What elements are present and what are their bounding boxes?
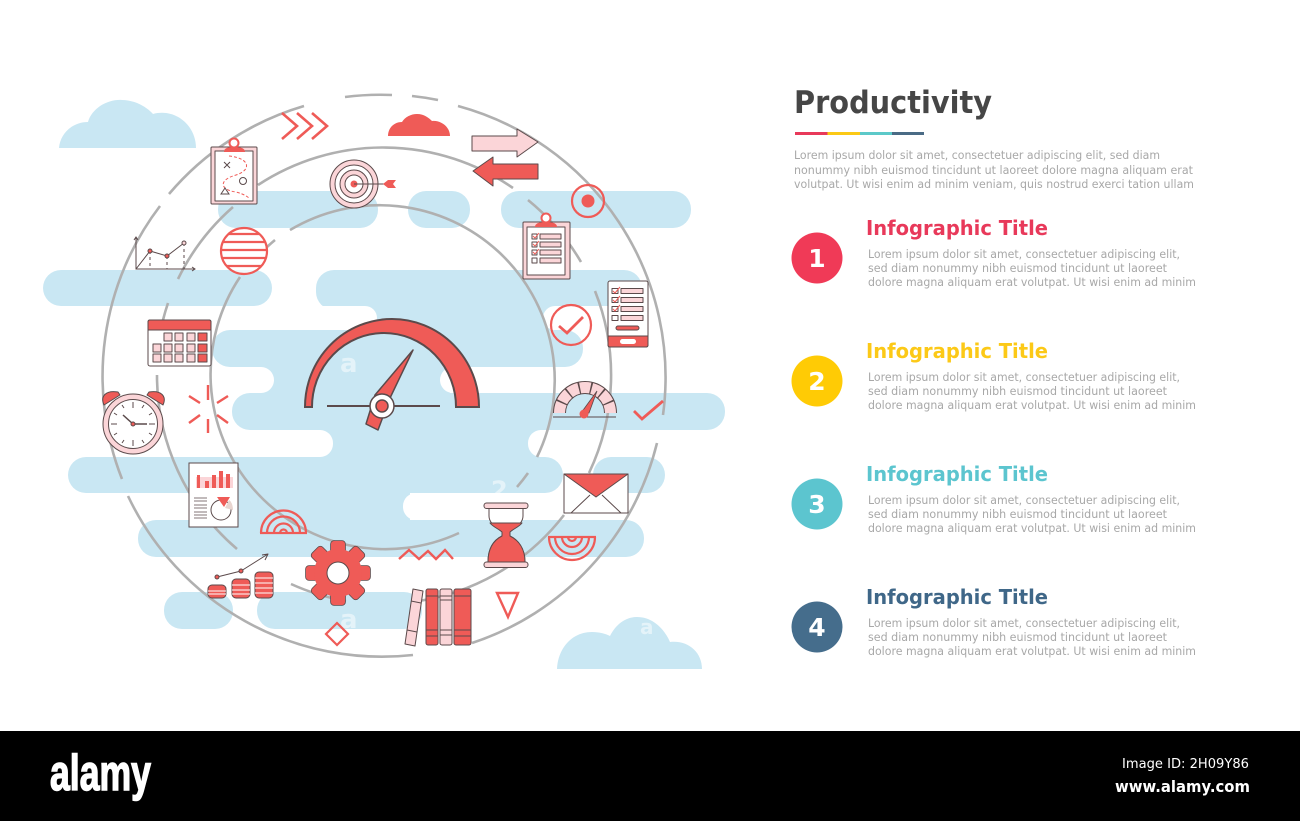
- badge 4: 4: [808, 613, 826, 642]
- watermark glyphs: a: [640, 615, 654, 639]
- watermark glyphs: [340, 349, 654, 639]
- item 2 text: [868, 370, 1196, 412]
- intro text: [794, 148, 1194, 191]
- item 3 text: dolore magna aliquam erat volutpat. Ut wisi enim ad minim: [868, 521, 1196, 535]
- icon: inverted rainbow: [548, 537, 596, 560]
- intro text: volutpat. Ut wisi enim ad minim veniam, quis nostrud exerci tation ullam: [794, 177, 1194, 191]
- icon: checklist clipboard: [523, 214, 570, 279]
- item 3 text: Lorem ipsum dolor sit amet, consectetuer adipiscing elit,: [868, 493, 1180, 507]
- item 2 text: dolore magna aliquam erat volutpat. Ut wisi enim ad minim: [868, 398, 1196, 412]
- item 2 text: sed diam nonummy nibh euismod tincidunt ut laoreet: [868, 384, 1167, 398]
- badge 2: 2: [808, 367, 826, 396]
- icon: rainbow arch: [260, 510, 307, 533]
- icon: check mark: [634, 401, 663, 419]
- icon: ring dot: [572, 185, 604, 217]
- icon: calendar: [148, 320, 211, 366]
- title: Productivity: [794, 85, 992, 121]
- item 3 text: sed diam nonummy nibh euismod tincidunt ut laoreet: [868, 507, 1167, 521]
- watermark glyphs: a: [340, 605, 358, 635]
- badge 1: [792, 232, 842, 284]
- item 1 text: Lorem ipsum dolor sit amet, consectetuer adipiscing elit,: [868, 247, 1180, 261]
- title underline: [795, 132, 924, 135]
- footer url: www.alamy.com: [1115, 777, 1250, 796]
- icon: central speedometer: [305, 319, 479, 430]
- icon: striped circle: [221, 228, 267, 274]
- icon: gear: [306, 541, 370, 605]
- icon: red cloud: [388, 114, 450, 136]
- icon: hourglass: [484, 503, 528, 568]
- icon: diamond: [326, 623, 348, 645]
- badge 3: [792, 478, 842, 530]
- icon: line chart: [134, 237, 195, 271]
- item 4 text: Lorem ipsum dolor sit amet, consectetuer adipiscing elit,: [868, 616, 1180, 630]
- item 2 heading: Infographic Title: [866, 339, 1048, 363]
- item 1 text: [868, 247, 1196, 289]
- item 4: [792, 585, 1196, 658]
- item 4 text: [868, 616, 1196, 658]
- intro text: Lorem ipsum dolor sit amet, consectetuer adipiscing elit, sed diam: [794, 148, 1160, 162]
- icon: books: [405, 589, 471, 646]
- badge 2: [792, 356, 842, 406]
- icon: triangle: [497, 593, 518, 617]
- watermark glyphs: 2: [491, 476, 508, 504]
- icon: coin stacks with growth arrow: [208, 554, 273, 598]
- item 4 heading: Infographic Title: [866, 585, 1048, 609]
- icon: phone checklist: [608, 281, 648, 347]
- icon: alarm clock: [103, 392, 164, 454]
- item 3 text: [868, 493, 1196, 535]
- item 1 heading: Infographic Title: [866, 216, 1048, 240]
- item 3: [792, 462, 1196, 535]
- badge 3: 3: [808, 490, 826, 519]
- icon: target with dart: [330, 160, 396, 208]
- icon: circled check: [551, 305, 591, 345]
- icon: envelope: [564, 474, 628, 513]
- badge 1: 1: [808, 244, 826, 273]
- footer band: [0, 731, 1300, 821]
- image id: Image ID: 2H09Y86: [1122, 756, 1249, 772]
- icon: report page: [189, 463, 238, 527]
- intro text: nonummy nibh euismod tincidunt ut laoreet dolore magna aliquam erat: [794, 163, 1193, 177]
- item 1 text: dolore magna aliquam erat volutpat. Ut wisi enim ad minim: [868, 275, 1196, 289]
- background: blue pill shapes and clouds: [43, 100, 728, 669]
- item 2 text: Lorem ipsum dolor sit amet, consectetuer adipiscing elit,: [868, 370, 1180, 384]
- concentric dashed rings: [103, 95, 666, 657]
- badge 4: [792, 602, 842, 652]
- icon: zigzag: [399, 550, 453, 559]
- watermark glyphs: a: [340, 349, 358, 379]
- item 4 text: sed diam nonummy nibh euismod tincidunt ut laoreet: [868, 630, 1167, 644]
- item 3 heading: Infographic Title: [866, 462, 1048, 486]
- item 2: [792, 339, 1196, 412]
- item 1 text: sed diam nonummy nibh euismod tincidunt ut laoreet: [868, 261, 1167, 275]
- icon: small gauge: [553, 388, 616, 418]
- footer logo: alamy: [50, 745, 151, 801]
- icon: chevrons: [282, 113, 327, 139]
- item 1: [792, 216, 1196, 289]
- icon: opposing arrows: [472, 129, 538, 186]
- icon: burst: [189, 385, 228, 433]
- item 4 text: dolore magna aliquam erat volutpat. Ut wisi enim ad minim: [868, 644, 1196, 658]
- icon: plan clipboard: [211, 138, 257, 204]
